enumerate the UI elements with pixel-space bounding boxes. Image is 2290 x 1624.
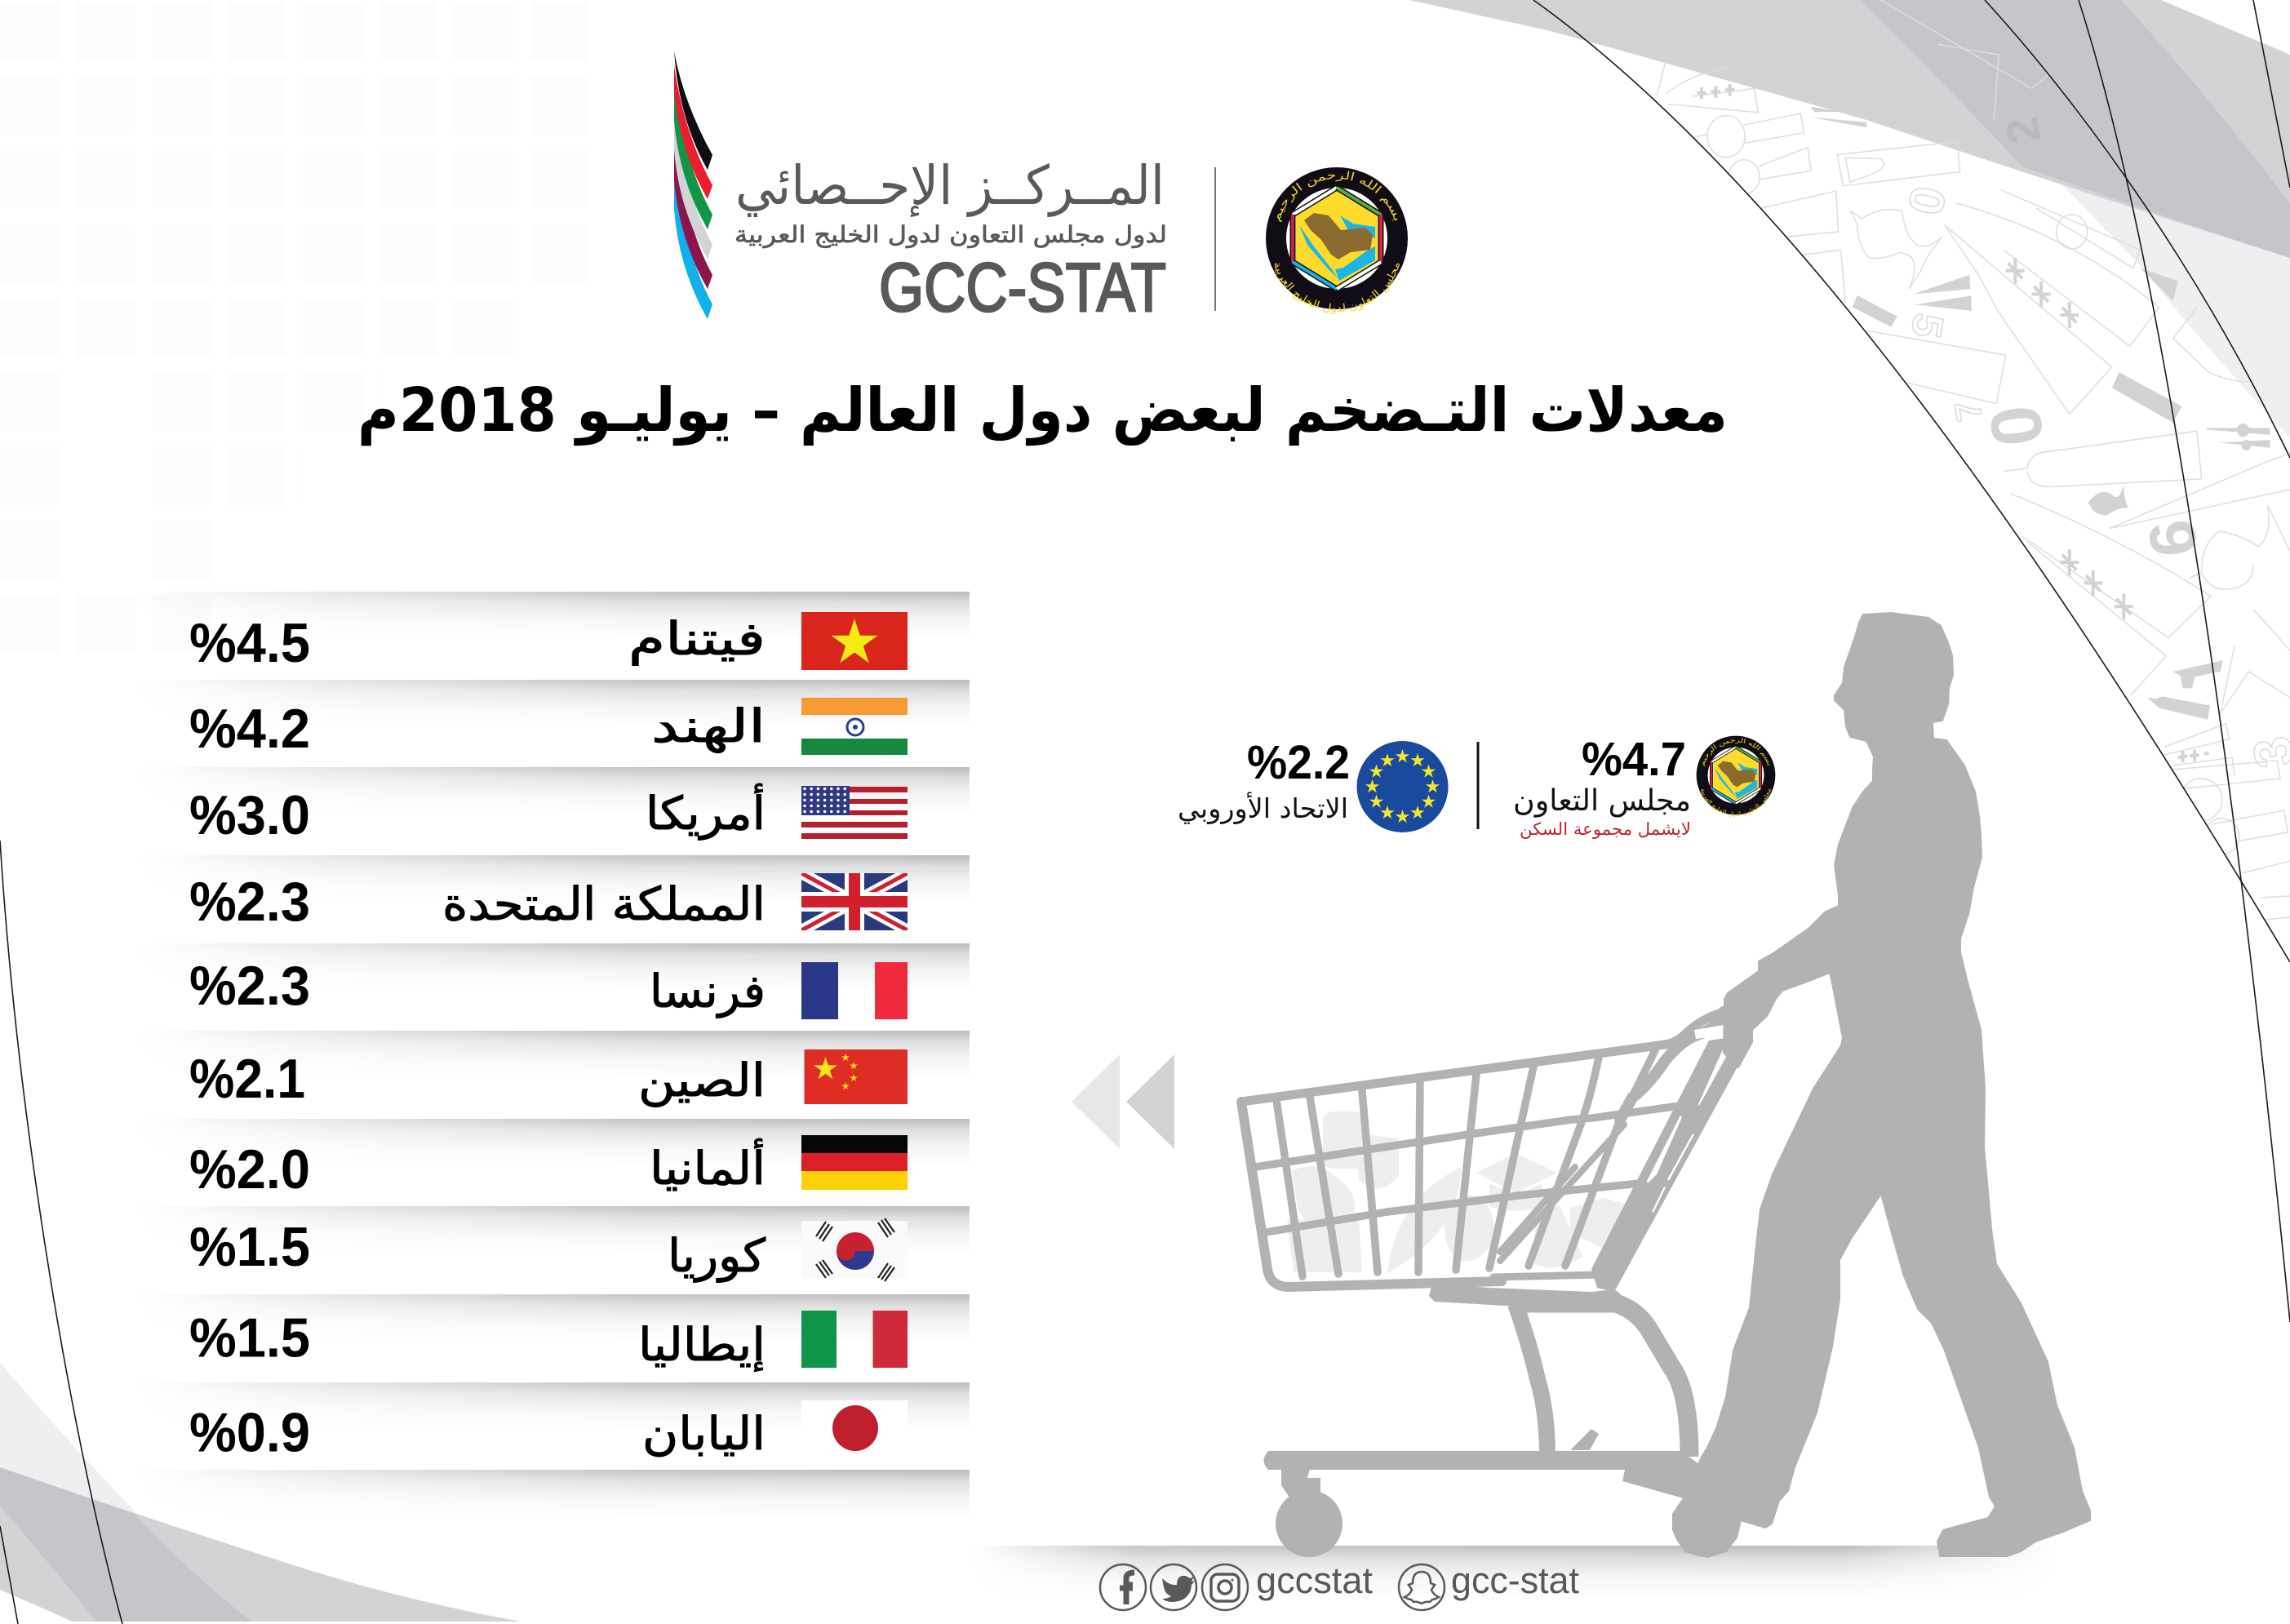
row: Italy [189,1307,908,1373]
GCC note: لايشمل مجموعة السكن [1520,819,1691,839]
value: %2.3 [189,871,310,933]
row: USA [189,783,908,846]
flag: India [801,698,908,755]
value: %1.5 [189,1307,310,1369]
row: India [189,698,908,760]
value: %0.9 [189,1402,310,1464]
emblem: GCC small: مجلس التعاون لدول الخليج العربية [1701,789,1771,818]
background digits [1897,113,2290,772]
value: %1.5 [189,1216,310,1278]
flag: Korea [801,1218,908,1281]
arrow: double left chevron [1072,1054,1174,1149]
cart basket wires [1241,1012,1724,1287]
shopping cart [1241,1012,1741,1557]
cart legs [1516,1303,1689,1457]
value: %4.2 [189,698,310,760]
background: top right line art [1657,0,2290,920]
value: %3.0 [189,784,310,846]
icon: facebook [1100,1564,1146,1610]
background digits: 5 [1902,310,1952,341]
row: Germany [189,1135,908,1200]
logo GCC-STAT wordmark: GCC-STAT [879,249,1166,326]
background: bottom left grey bands [0,1363,521,1622]
country name: اليابان [642,1408,766,1461]
row: France [189,955,908,1019]
shopping cart contents (faint) [1287,1112,1640,1273]
emblem: GCC large: بسم الله الرحمن الرحيم [1277,171,1397,222]
background digits: 0 [1973,401,2059,450]
row: United Kingdom [189,871,908,933]
cart pole slits [1647,1025,1734,1213]
background digits: 2 [1995,113,2050,148]
country name: إيطاليا [638,1319,766,1373]
GCC label: مجلس التعاون [1513,784,1691,818]
social media footer [1100,1560,1579,1610]
floor shadow [996,1546,2005,1582]
right wheel [1672,1490,1739,1557]
background digits: 7 [1947,397,1990,424]
value: %4.5 [189,612,310,674]
left wheel fork [1281,1469,1325,1498]
row: Japan [189,1400,908,1464]
GCC value: %4.7 [1582,733,1686,786]
country name: المملكة المتحدة [442,878,766,931]
handle: gcc-stat: gcc-stat [1451,1560,1579,1601]
logo arabic subtitle: لدول مجلس التعاون لدول الخليج العربية [734,221,1167,248]
background: faint square grid [0,0,606,653]
stat: EU [1178,736,1448,832]
flag: UK [801,873,908,930]
emblem: GCC large [1266,167,1408,314]
cart pole [1591,1036,1741,1292]
emblem: GCC large: مجلس التعاون لدول الخليج العربية [1275,263,1400,314]
row: China [189,1048,908,1110]
country name: أمريكا [646,783,766,841]
flag: USA [801,786,908,839]
cart lever [1555,1429,1599,1450]
icon: snapchat [1399,1564,1445,1610]
EU label: الاتحاد الأوروبي [1178,792,1348,824]
EU flag circle [1356,741,1448,832]
title: معدلات التـضخم لبعض دول العالم – يوليـو 2018م [357,375,1728,446]
row: Vietnam [189,612,908,674]
flag: Germany [801,1135,908,1190]
value: %2.0 [189,1138,310,1200]
flag: Vietnam [801,612,908,670]
logo: GCC-STAT [674,51,1167,326]
country name: كوريا [668,1230,766,1283]
flag: China [805,1049,908,1104]
icon: twitter [1151,1564,1196,1610]
cart bottom bar [1263,1451,1706,1498]
emblem: GCC small [1696,736,1776,818]
country name: الهند [651,700,766,753]
background digits: 6 [2135,516,2211,561]
logo arabic name: المــركــز الإحــصائي [735,154,1165,217]
stat: GCC [1513,733,1776,839]
icon: instagram [1202,1564,1248,1610]
person silhouette [1673,613,2090,1557]
emblem: GCC small: بسم الله الرحمن الرحيم [1702,738,1769,766]
country name: ألمانيا [650,1138,766,1196]
left wheel [1276,1490,1342,1557]
flag: Japan [801,1400,908,1457]
table row shadows [201,592,970,1502]
EU value: %2.2 [1247,736,1350,789]
flag: Italy [801,1311,908,1368]
handle: gccstat: gccstat [1256,1560,1373,1601]
country name: فرنسا [650,965,766,1018]
logo ribbon [674,51,712,319]
background: top right grey bands [1409,0,2290,437]
flag: France [801,962,908,1019]
value: %2.3 [189,955,310,1017]
country name: فيتنام [628,613,766,666]
row: Korea [189,1216,908,1283]
cart base slab [1429,1284,1624,1311]
background digits: 0 [1897,182,1957,220]
value: %2.1 [189,1048,305,1110]
country name: الصين [638,1054,766,1107]
